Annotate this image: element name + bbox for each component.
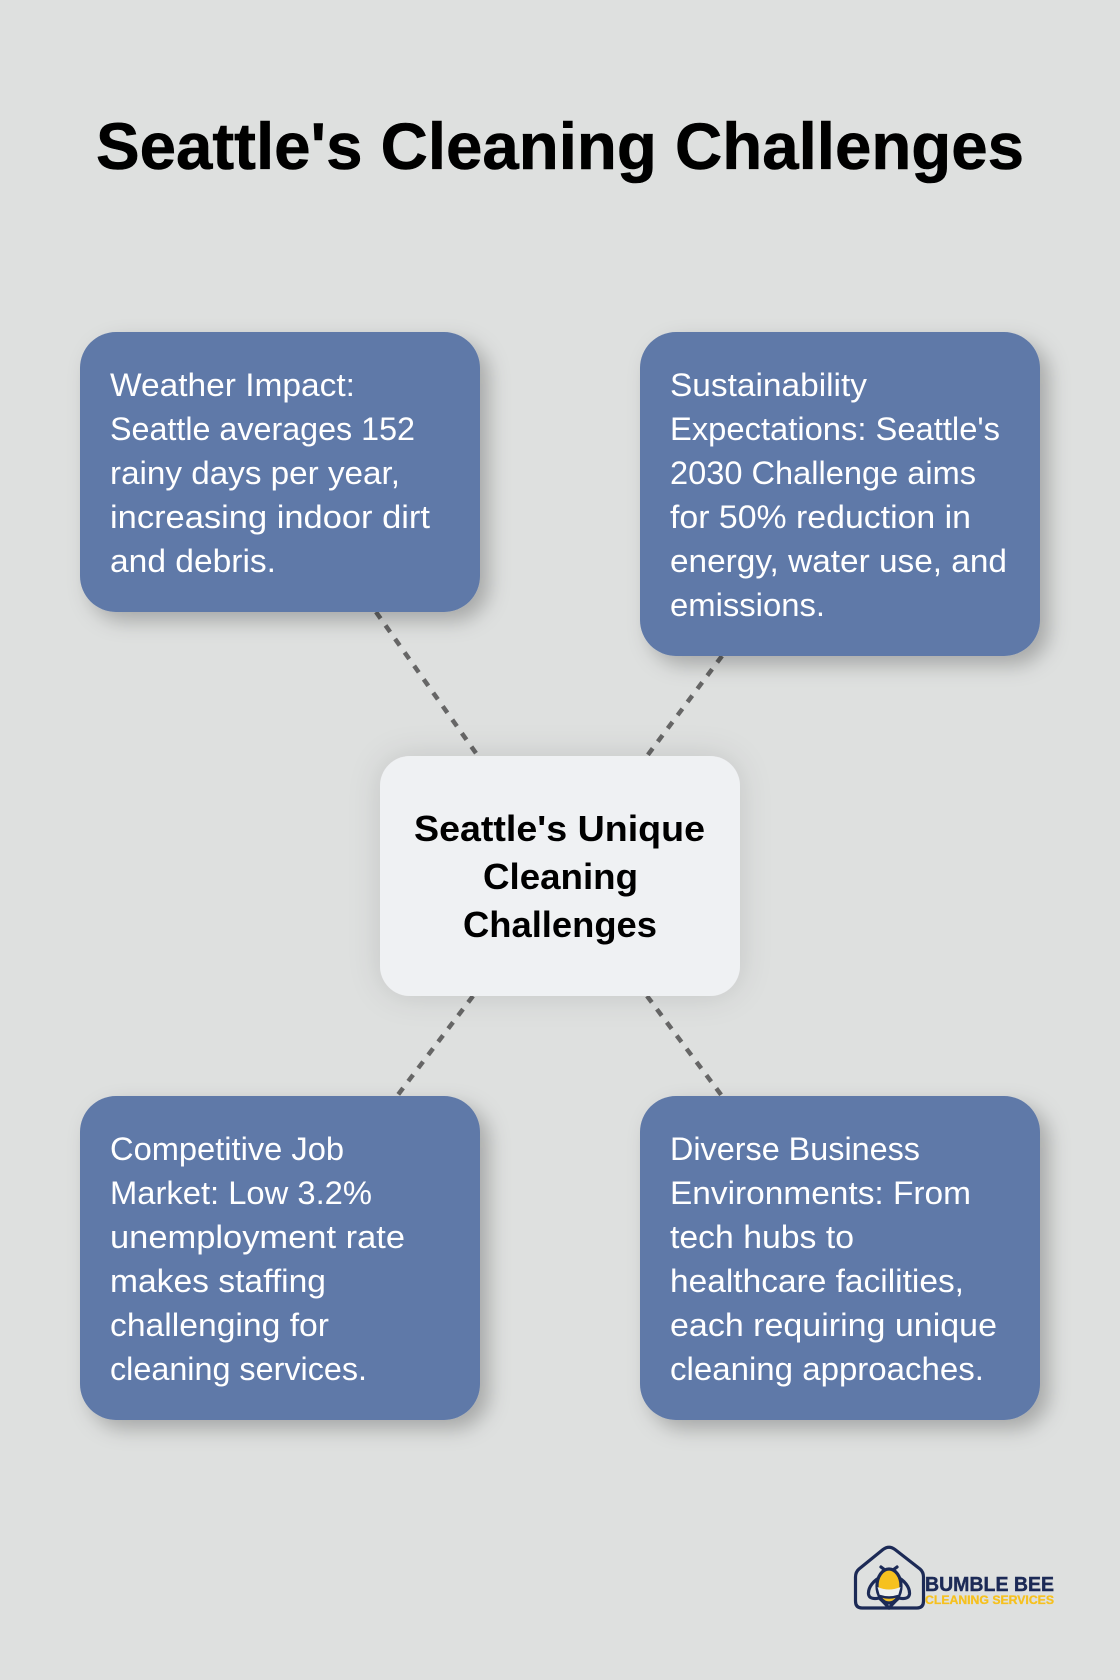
panel: sustainability expectations: 2030 Challenge aims — [670, 455, 976, 491]
panel: weather impact — [80, 332, 480, 612]
panel: diverse business environments: tech hubs to — [670, 1219, 854, 1255]
panel: competitive job market: unemployment rate — [110, 1219, 405, 1255]
panel: weather impact: Weather Impact: — [110, 367, 355, 403]
panel: central topic — [380, 756, 740, 996]
panel: competitive job market: cleaning services. — [110, 1351, 367, 1387]
panel: competitive job market: Competitive Job — [110, 1131, 344, 1167]
panel: central topic: Challenges — [463, 904, 657, 945]
panel: diverse business environments: each requiring unique — [670, 1307, 997, 1343]
panel: sustainability expectations: Expectations: Seattle's — [670, 411, 1000, 447]
panel: diverse business environments — [640, 1096, 1040, 1420]
panel: weather impact: increasing indoor dirt — [110, 499, 430, 535]
panel: diverse business environments: Environments: From — [670, 1175, 971, 1211]
panel: weather impact: Seattle averages 152 — [110, 411, 415, 447]
panel: competitive job market: makes staffing — [110, 1263, 326, 1299]
panel: weather impact: rainy days per year, — [110, 455, 400, 491]
panel: sustainability expectations — [640, 332, 1040, 656]
panel: central topic: Cleaning — [483, 856, 638, 897]
panel: weather impact: and debris. — [110, 543, 276, 579]
panel: competitive job market: challenging for — [110, 1307, 329, 1343]
panel: sustainability expectations: emissions. — [670, 587, 825, 623]
panel: central topic: Seattle's Unique — [414, 808, 705, 849]
dashed connectors — [376, 612, 722, 1096]
logo: Bumble Bee Cleaning Services — [856, 1547, 1054, 1608]
title: Seattle's Cleaning Challenges — [96, 109, 1024, 183]
panel: sustainability expectations: for 50% reduction in — [670, 499, 971, 535]
panel: diverse business environments: healthcare facilities, — [670, 1263, 964, 1299]
panel: diverse business environments: Diverse Business — [670, 1131, 920, 1167]
panel: competitive job market: Market: Low 3.2% — [110, 1175, 372, 1211]
panel: sustainability expectations: Sustainability — [670, 367, 868, 403]
panel: diverse business environments: cleaning approaches. — [670, 1351, 984, 1387]
panel: competitive job market — [80, 1096, 480, 1420]
icon: house with bee — [856, 1547, 924, 1608]
panel: sustainability expectations: energy, water use, and — [670, 543, 1007, 579]
logo wordmark: BUMBLE BEE — [925, 1574, 1054, 1596]
logo tagline: CLEANING SERVICES — [925, 1595, 1054, 1607]
